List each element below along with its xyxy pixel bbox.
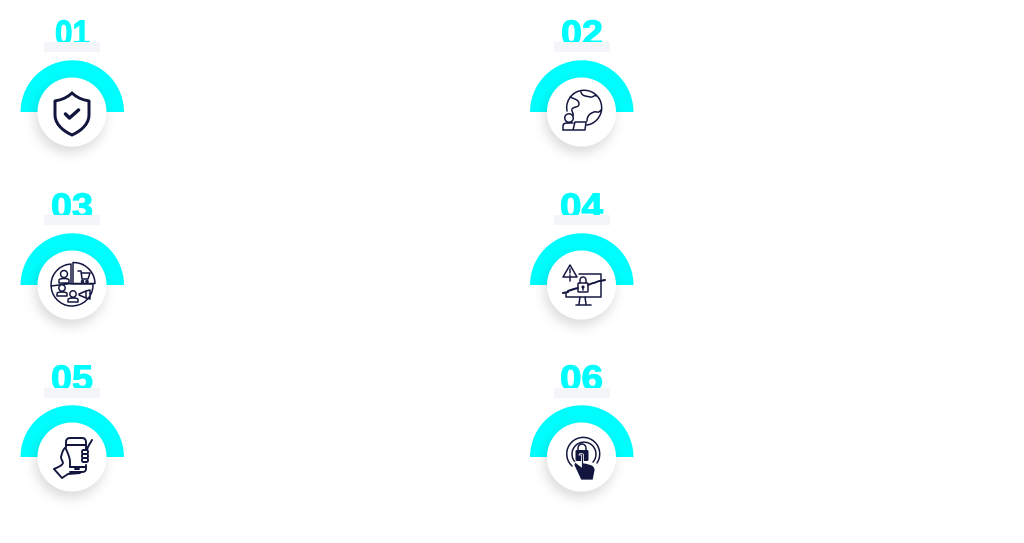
panel: item 03 (20, 187, 124, 320)
cyan arc 04 (530, 233, 634, 285)
icon: finger pressing lock (567, 437, 600, 480)
white circle 03 (38, 250, 106, 320)
number 03: 03 (51, 187, 93, 226)
label bar 01 (44, 42, 100, 52)
white circle 05 (38, 422, 106, 492)
panel: item 06 (530, 359, 634, 492)
number 04: 04 (560, 187, 604, 226)
cyan arc 06 (530, 405, 634, 457)
cyan arc 05 (20, 405, 124, 457)
panel: item 05 (20, 359, 124, 492)
white circle 01 (38, 78, 106, 146)
number 05: 05 (51, 359, 93, 398)
icon: hand holding phone (54, 438, 92, 478)
white circle 04 (547, 250, 616, 320)
panel: item 02 (530, 14, 634, 146)
icon: segmented pie with people and cart (51, 262, 95, 306)
cyan arc 02 (530, 60, 634, 112)
number 01: 01 (55, 14, 90, 53)
panel: item 01 (20, 14, 124, 146)
number 06: 06 (560, 359, 603, 398)
number 02: 02 (561, 14, 603, 53)
cyan arc 03 (20, 233, 124, 285)
panel: item 04 (530, 187, 634, 320)
label bar 06 (554, 388, 610, 398)
label bar 05 (44, 388, 100, 398)
label bar 03 (44, 215, 100, 225)
icon: shield with check (55, 93, 89, 135)
label bar 04 (554, 215, 610, 225)
cyan arc 01 (20, 60, 124, 112)
icon: warning sign and chained monitor (563, 265, 605, 305)
white circle 06 (547, 422, 616, 492)
icon: globe with person at laptop (563, 90, 602, 130)
label bar 02 (554, 42, 610, 52)
white circle 02 (547, 78, 616, 146)
